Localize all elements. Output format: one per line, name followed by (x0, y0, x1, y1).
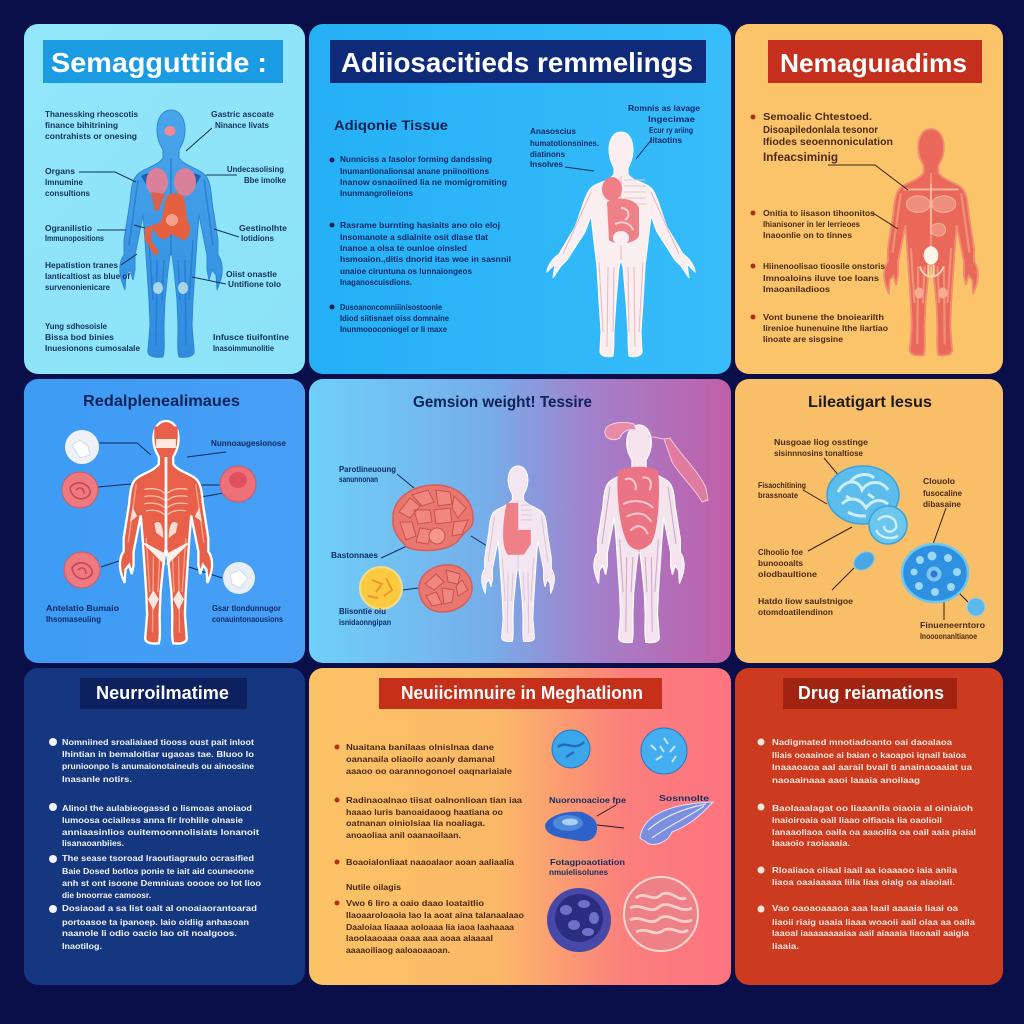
figure: red muscular body (120, 421, 212, 644)
bullet list: die bnoorrae camoosr. (62, 890, 151, 900)
heading: Adiqonie Tissue: Adiqonie Tissue (334, 117, 448, 133)
bullet list: Vao oaoaoaaaoa aaa laail aaaaia liaai oa (772, 903, 958, 913)
callout labels: Iitaotins (650, 135, 682, 145)
callout labels: Romnis as lavage (628, 103, 700, 113)
leader lines (98, 443, 226, 578)
bullet list: Boaoialonliaat naaoalaor aoan aaliaalia (346, 857, 514, 867)
bullet list: Ilaoaaroloaoia lao la aoat aina talanaalaao (346, 910, 524, 920)
callout labels left: finance bihitrining (45, 120, 118, 130)
callout labels left: Ianticaltiost as blue of (45, 271, 130, 281)
bullet list: Rloaiiaoa oiiaal iaail aa ioaaaoo iaia aniia (772, 865, 957, 875)
bullet list: Imaoaniladioos (763, 284, 830, 294)
callout labels left: Ogranilistio (45, 223, 92, 233)
callout labels: Antelatio Bumaio (46, 603, 119, 613)
bullet list (750, 112, 893, 344)
yellow cell (360, 567, 402, 609)
bullet list (49, 737, 261, 951)
bullet list: Vont bunene the bnoiearilth (763, 312, 884, 322)
bullet list: hsmoaion.,ditis dnorid itas woe in sasnnil (340, 254, 511, 264)
title bar: Neuiicimnuire in Meghatlionn: Neuiicimnuire in Meghatlionn (401, 683, 643, 703)
callout labels: Ingecimae (648, 114, 695, 124)
bullet list: Onitia to iisason tihoonitos (763, 208, 875, 218)
callout labels: Nunnoaugesionose (211, 438, 286, 448)
small cell right (967, 598, 985, 616)
panel: muscle body (24, 379, 305, 663)
callout labels left: consultions (45, 188, 90, 198)
callout labels: Anasoscius (530, 126, 576, 136)
bullet list: Hiinenoolisao tioosile onstoris (763, 261, 885, 271)
fat tissue circle (624, 877, 698, 951)
callout labels left: contrahists or onesing (45, 131, 137, 141)
bullet list: Iiaoa oaaiaaaaa liila liaa oiaig oa aiaoiaii. (772, 877, 955, 887)
callout labels right: Untifione tolo (228, 279, 281, 289)
callout labels left: Yung sdhosoisle (45, 321, 107, 331)
heading: Redalplenealimaues (83, 393, 240, 410)
bullet list: Radinaoalnao tiisat oalnonlioan tian iaa (346, 795, 522, 805)
bullet list: liaoii riaig uaaia liaaa woaoii aail oiaa aa oaila (772, 917, 975, 927)
bullet list: Dusoanoncomniiinisostoonle (340, 302, 442, 312)
bullet list: prunioonpo ls anumaionotaineuls ou ainoosine (62, 761, 254, 771)
bullet list: Dosiaoad a sa list oait al onoaiaorantoarad (62, 903, 257, 913)
bullet list: laaoal iaaaaaaaaiaa aail aiaaaia liaoaail aaigia (772, 928, 969, 938)
callout labels: humatotionsnines. (530, 138, 599, 148)
image labels: Sosnnolte (659, 793, 709, 803)
bullet list: Iinoate are sisgsine (763, 334, 843, 344)
fat tissue blob large (393, 485, 473, 550)
callout labels: isnidaonngipan (339, 617, 391, 627)
bullet list: Inanoe a olsa te ounloe oinsled (340, 243, 467, 253)
figure: white body with pink organs (547, 132, 695, 357)
bullet list: oatnanan oiniolsiaa lia noaliaga. (346, 818, 485, 828)
bullet list: liaaia. (772, 941, 799, 951)
bullet list: Iirenioe hunenuine lthe liartiao (763, 323, 888, 333)
callout labels: Clouolo (923, 476, 955, 486)
blue organ cell (545, 812, 597, 841)
callout labels: dibasaine (923, 499, 961, 509)
bullet list: anniaasinlios ouitemoonnolisiats lonanoit (62, 827, 259, 837)
panel: orange body panel (735, 24, 1003, 374)
callout labels right: Bbe imolke (244, 175, 286, 185)
bullet list: unaioe ciruntuna os lunnaiongeos (340, 266, 472, 276)
callout labels left: Hepatistion tranes (45, 260, 118, 270)
callout labels: sanunnonan (339, 474, 378, 484)
title bar: Adiiosacitieds remmelings (330, 40, 706, 83)
callout labels: sisinnnosins tonaltiose (774, 448, 863, 458)
callout labels right: Ninance livats (215, 120, 269, 130)
figure: large body with pink organs (594, 425, 684, 643)
bullet list: Rasrame burnting hasiaits ano olo eloj (340, 220, 500, 230)
title bar: Nemaguiadims: Nemaguıadims (780, 48, 967, 78)
callout labels left: Organs (45, 166, 75, 176)
bullet list (758, 737, 976, 951)
title bar: Drug reiamations: Drug reiamations (798, 683, 944, 703)
bullet list: Ihintian in bemaloitiar ugaoas tae. Bluoo lo (62, 749, 254, 759)
bullet list: Inaoonlie on to tinnes (763, 230, 852, 240)
bullet list: Inaganoscuisdions. (340, 277, 412, 287)
bullet list: lanaaoliaoa oaila oa aaaoilia oa oail aaia piaial (772, 827, 976, 837)
callout labels left (45, 109, 140, 353)
title bar: Neurroilmatime (80, 678, 247, 709)
callout labels: Hatdo liow saulstnigoe (758, 596, 853, 606)
bullet list: Nutile oilagis (346, 882, 401, 892)
panel: weight tissue comparison (309, 379, 731, 663)
callout labels right: Inasoimmunolitie (213, 343, 274, 353)
bullet list: naoaainaaa aaoi laaaia anoilaag (772, 775, 920, 785)
bullet list: Insomanote a sdialnite osit dlase tlat (340, 232, 488, 242)
callout labels left: Immunopositions (45, 233, 104, 243)
bullet list: aaaoo oo oarannogonoel oaqnariaiale (346, 766, 512, 776)
bullet list: Semoalic Chtestoed. (763, 112, 872, 123)
bullet list: Inunmoooconiogel or li maxe (340, 324, 447, 334)
leader lines (79, 128, 239, 284)
callout labels left: Thanessking rheoscotis (45, 109, 138, 119)
large blue cell with nucleus (902, 544, 968, 602)
callout labels left: Bissa bod binies (45, 332, 114, 342)
bullet list: Nadigmated mnotiadoanto oai daoalaoa (772, 737, 952, 747)
bullet list: aaaaoiliaog aaloaoaaoan. (346, 945, 450, 955)
leader lines (565, 139, 652, 171)
bullet list: Baie Dosed botlos ponie te iait aid couneoone (62, 866, 254, 876)
bullet list: portoasoe ta ipanoep. laio oidiig anhasoan (62, 917, 249, 927)
bullet list: lumoosa ociailess anna fir lrohlile olnasie (62, 815, 243, 825)
callout labels: diatinons (530, 149, 565, 159)
bullet list (334, 742, 524, 955)
bullet list: Idiod siitisnaet oiss domnaine (340, 313, 449, 323)
title bar: Drug reiamations (783, 678, 957, 709)
bullet list: Nomniined sroaliaiaed tiooss oust pait inloot (62, 737, 254, 747)
callout labels: bunoooalts (758, 558, 803, 568)
panel: neuroimmune in megahation (309, 668, 731, 985)
bullet list: Nunniciss a fasolor forming dandssing (340, 154, 492, 164)
callout labels: brassnoate (758, 490, 798, 500)
bullet list: Infeacsiminig (763, 150, 838, 164)
title bar: Semagguttiide (43, 40, 283, 83)
panel: adipose tissue remodeling (309, 24, 731, 374)
callout labels right (211, 109, 289, 353)
callout labels: Blisontie oiu (339, 606, 386, 616)
bullet list: naanole li odio oacio lao oit noalgoos. (62, 928, 237, 938)
bullet list: anoaoliaa anil oaanaoilaan. (346, 830, 461, 840)
callout labels (530, 103, 700, 169)
figure: red muscular body (884, 129, 978, 355)
callout labels: conauintonaousions (212, 614, 283, 624)
leader lines (803, 458, 970, 620)
image labels: nmuielisolunes (549, 867, 608, 877)
figure: body with pink organs (482, 466, 554, 642)
muscle fin shape (640, 802, 713, 844)
callout labels (331, 464, 396, 627)
bullet list: Inaotilog. (62, 941, 102, 951)
bullet list: Alinol the aulabieogassd o lismoas anoiaod (62, 803, 252, 813)
cell cluster (827, 466, 907, 544)
callout labels: olodbaultione (758, 569, 817, 579)
leader lines (828, 165, 908, 229)
bullet list: Ihianisoner in ler lerrieoes (763, 219, 860, 229)
leader lines (381, 474, 487, 590)
figure: blue anatomical body (120, 110, 222, 357)
callout labels: Gsar tlondunnugor (212, 603, 282, 613)
callout labels right: Gestinolhte (239, 223, 287, 233)
bullet list: Baolaaalagat oo liaaanila oiaoia al oiniaioh (772, 803, 973, 813)
bullet list: Imnoaloins iluve toe loans (763, 273, 879, 283)
bullet list: haaao luris banoaidaoog haatiana oo (346, 807, 503, 817)
heading: Lileatigart lesus (808, 394, 932, 411)
callout labels right: Oiist onastle (226, 269, 277, 279)
callout labels left: Imnumine (45, 177, 83, 187)
bullet list: Vwo 6 liro a oaio daao loataitlio (346, 898, 484, 908)
callout labels: Inoooonanltianoe (920, 631, 977, 641)
bullet list: Disoapiledonlala tesonor (763, 125, 878, 136)
bullet list: Daaloiaa liaaaa aoloaaa lia iaoa laahaaaa (346, 922, 514, 932)
title bar: Adiiosacitieds remmelings: Adiiosacitieds remmelings (341, 47, 693, 78)
intestine fragments (605, 422, 708, 502)
bullet list: laaaoio raoiaaaia. (772, 838, 850, 848)
image labels: Nuoronoacioe fpe (549, 795, 626, 805)
bullet list: Inaioiroaia oail liaao olfiaoia lia oaolioil (772, 815, 942, 825)
purple cell (547, 888, 611, 952)
bullet list: Inaaaoaoa aal aarail bvail ti anainaoaaiat ua (772, 762, 972, 772)
bullet list: Inasanle notirs. (62, 774, 132, 784)
callout labels: Bastonnaes (331, 550, 378, 560)
bullet list: Inumantionalionsal anane pniinoitions (340, 166, 489, 176)
bullet list: anh st ont isoone Demniuas ooooe oo lot lioo (62, 878, 261, 888)
callout labels right: Iotidions (241, 233, 274, 243)
bullet list: The sease tsoroad lraoutiagraulo ocrasified (62, 853, 254, 863)
title bar: Neuiicimnuire in Meghatlionn (379, 678, 662, 709)
callout labels right: Gastric ascoate (211, 109, 274, 119)
bullet list (330, 154, 511, 334)
callout labels: fusocaline (923, 488, 962, 498)
callout labels: Insolves (530, 159, 563, 169)
bullet list: Inanow osnaoiined lia ne momigromiting (340, 177, 507, 187)
small cell (850, 548, 878, 574)
bullet list: Ifiodes seoennoniculation (763, 137, 893, 148)
callout labels: Ihsomaseuiing (46, 614, 101, 624)
callout labels left: survenonienicare (45, 282, 110, 292)
callout labels left: Inuesionons cumosalale (45, 343, 140, 353)
callout labels: Finueneerntoro (920, 620, 985, 630)
callout labels right: Undecasolising (227, 164, 284, 174)
callout labels: Ecur ry ariing (649, 125, 693, 135)
fat tissue blob small (419, 565, 472, 612)
image labels (549, 793, 709, 877)
bullet list: Iliais ooaainoe ai baian o kaoapoi iqnail baioa (772, 750, 966, 760)
heading: Gemsion weight! Tessire (413, 394, 592, 411)
callout labels: Nusgoae liog osstinge (774, 437, 868, 447)
panel: drug reactions (735, 668, 1003, 985)
bullet list: Inunmangrolieions (340, 188, 413, 198)
blue cell circles (552, 728, 687, 774)
leader lines (597, 805, 624, 828)
callout labels: otomdoatilendinon (758, 607, 833, 617)
callout labels: Fisaochitining (758, 480, 806, 490)
callout labels: Clhoolio foe (758, 547, 803, 557)
panel: neuroimmune list (24, 668, 305, 985)
bullet list: oananaila oliaoilo aoanly damanal (346, 754, 495, 764)
callout labels: Parotlineuoung (339, 464, 396, 474)
bullet list: laoolaaoaaa oaaa aaa aoaa alaaaal (346, 933, 493, 943)
title bar: Neurroilmatime: Neurroilmatime (96, 683, 229, 703)
panel: blue cells (735, 379, 1003, 663)
title bar: Nemaguiadims (768, 40, 982, 83)
callout labels (758, 437, 985, 641)
image labels: Fotagpoaotiation (550, 857, 625, 867)
callout labels right: Infusce tiuifontine (213, 332, 289, 342)
title bar: Semagguttiide: Semagguttiide : (51, 47, 267, 78)
bullet list: Iisanaoanbiies. (62, 838, 124, 848)
tissue circles (62, 430, 256, 594)
callout labels (46, 438, 286, 624)
bullet list: Nuaitana banilaas olnislnaa dane (346, 742, 494, 752)
panel: semaglutide body map (24, 24, 305, 374)
